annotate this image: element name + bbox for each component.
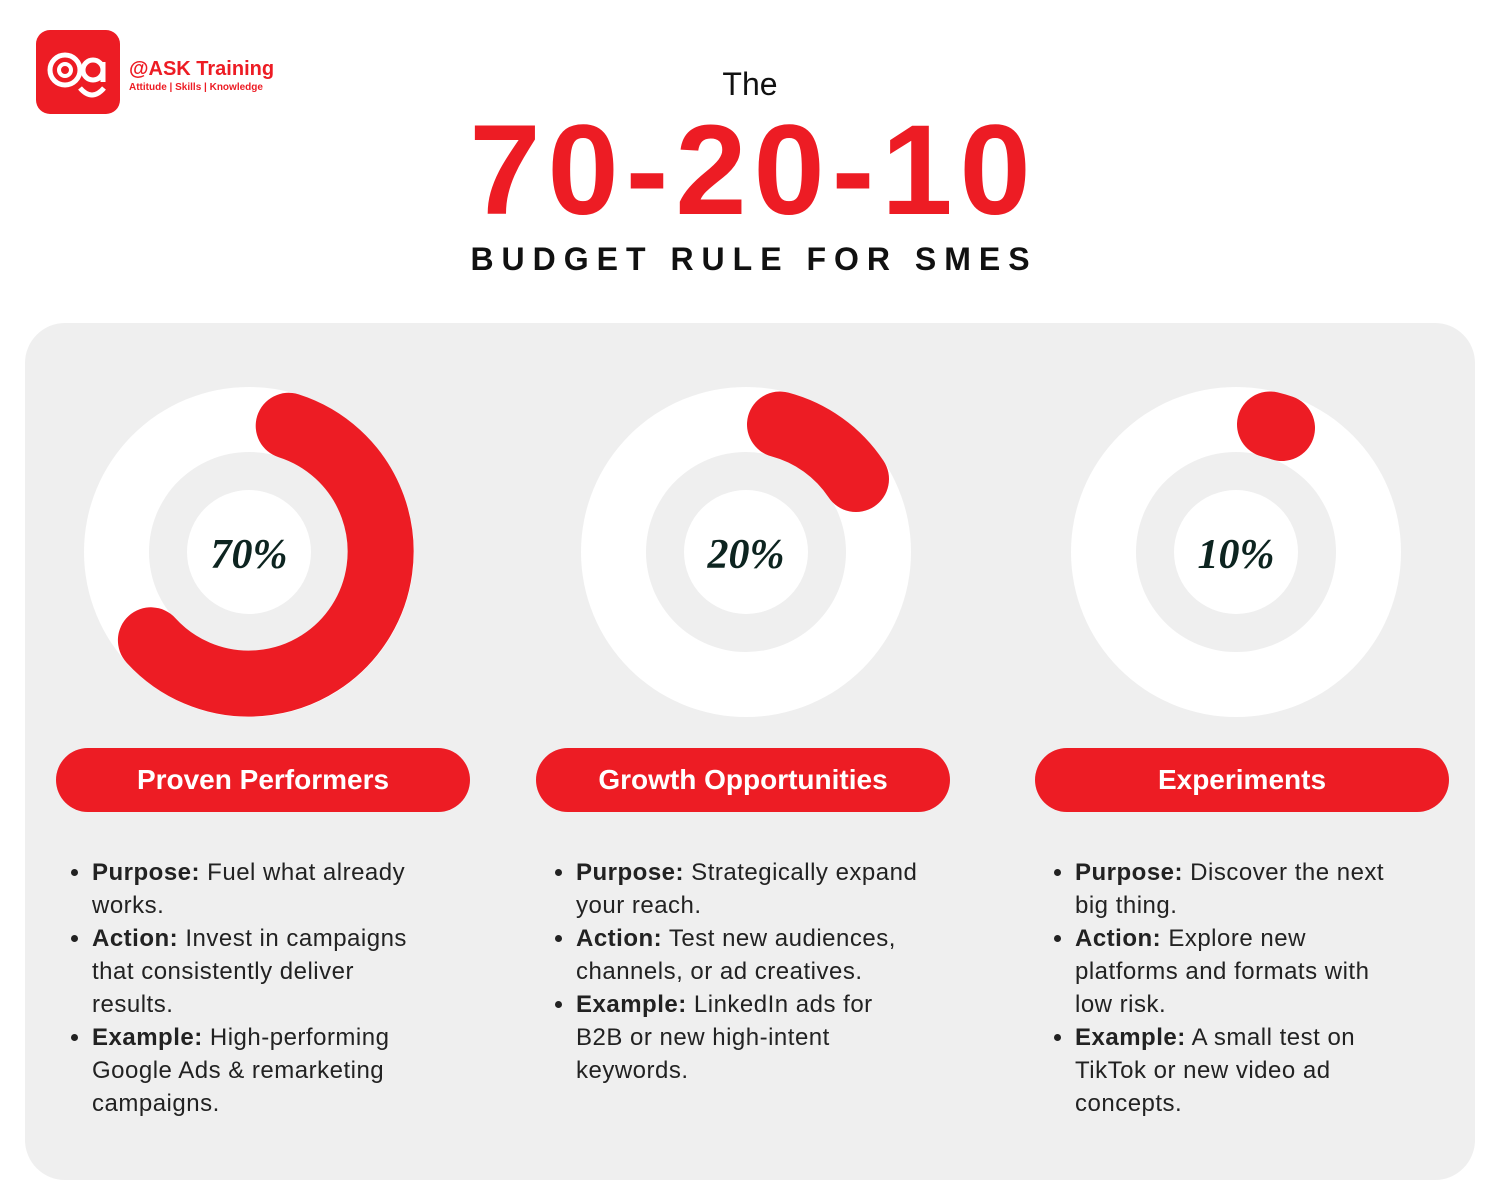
pill: Growth Opportunities (536, 748, 950, 812)
list: growth opportunities (555, 859, 917, 1084)
list: experiments (1054, 859, 1384, 1117)
donut: 10%: 10% (1198, 532, 1274, 578)
title (469, 66, 1038, 277)
list: growth opportunities: keywords. (576, 1057, 689, 1084)
donut: 70% (84, 387, 414, 717)
pill: Growth Opportunities: Growth Opportunities (598, 764, 888, 795)
list: proven performers: Purpose: Fuel what already works. (92, 859, 405, 919)
list: proven performers: Example: High-performing Google Ads & remarketing campaigns. (92, 1024, 389, 1117)
title: The (722, 66, 778, 102)
list: growth opportunities: Action: Test new audiences, channels, or ad creatives. (576, 925, 896, 985)
donut: 10% (1071, 387, 1401, 717)
panel (25, 323, 1475, 1180)
logo text (129, 58, 274, 93)
list: growth opportunities: Purpose: Strategically expand your reach. (576, 859, 917, 919)
icon: logo mark (36, 30, 120, 114)
pill: Proven Performers (56, 748, 470, 812)
donut: 20% (581, 387, 911, 717)
list: proven performers: Action: Invest in campaigns that consistently deliver results. (92, 925, 407, 1018)
list: experiments: Action: Explore new platforms and formats with low risk. (1075, 925, 1369, 1018)
logo text: Attitude | Skills | Knowledge (129, 82, 263, 93)
title: 70-20-10 (469, 99, 1038, 242)
list: experiments: Purpose: Discover the next big thing. (1075, 859, 1384, 919)
pill: Experiments (1035, 748, 1449, 812)
donut: 20%: 20% (706, 532, 784, 578)
list: proven performers (71, 859, 407, 1117)
list: experiments: Example: A small test on TikTok or new video ad concepts. (1075, 1024, 1355, 1117)
logo (36, 30, 274, 114)
logo text: @ASK Training (129, 58, 274, 80)
donut: 70%: 70% (210, 532, 288, 578)
list: growth opportunities: Example: LinkedIn ads for (576, 991, 873, 1018)
pill: Proven Performers: Proven Performers (137, 764, 389, 795)
list: growth opportunities: B2B or new high-intent (576, 1024, 830, 1051)
pill: Experiments: Experiments (1158, 764, 1326, 795)
title: BUDGET RULE FOR SMES (470, 241, 1038, 277)
